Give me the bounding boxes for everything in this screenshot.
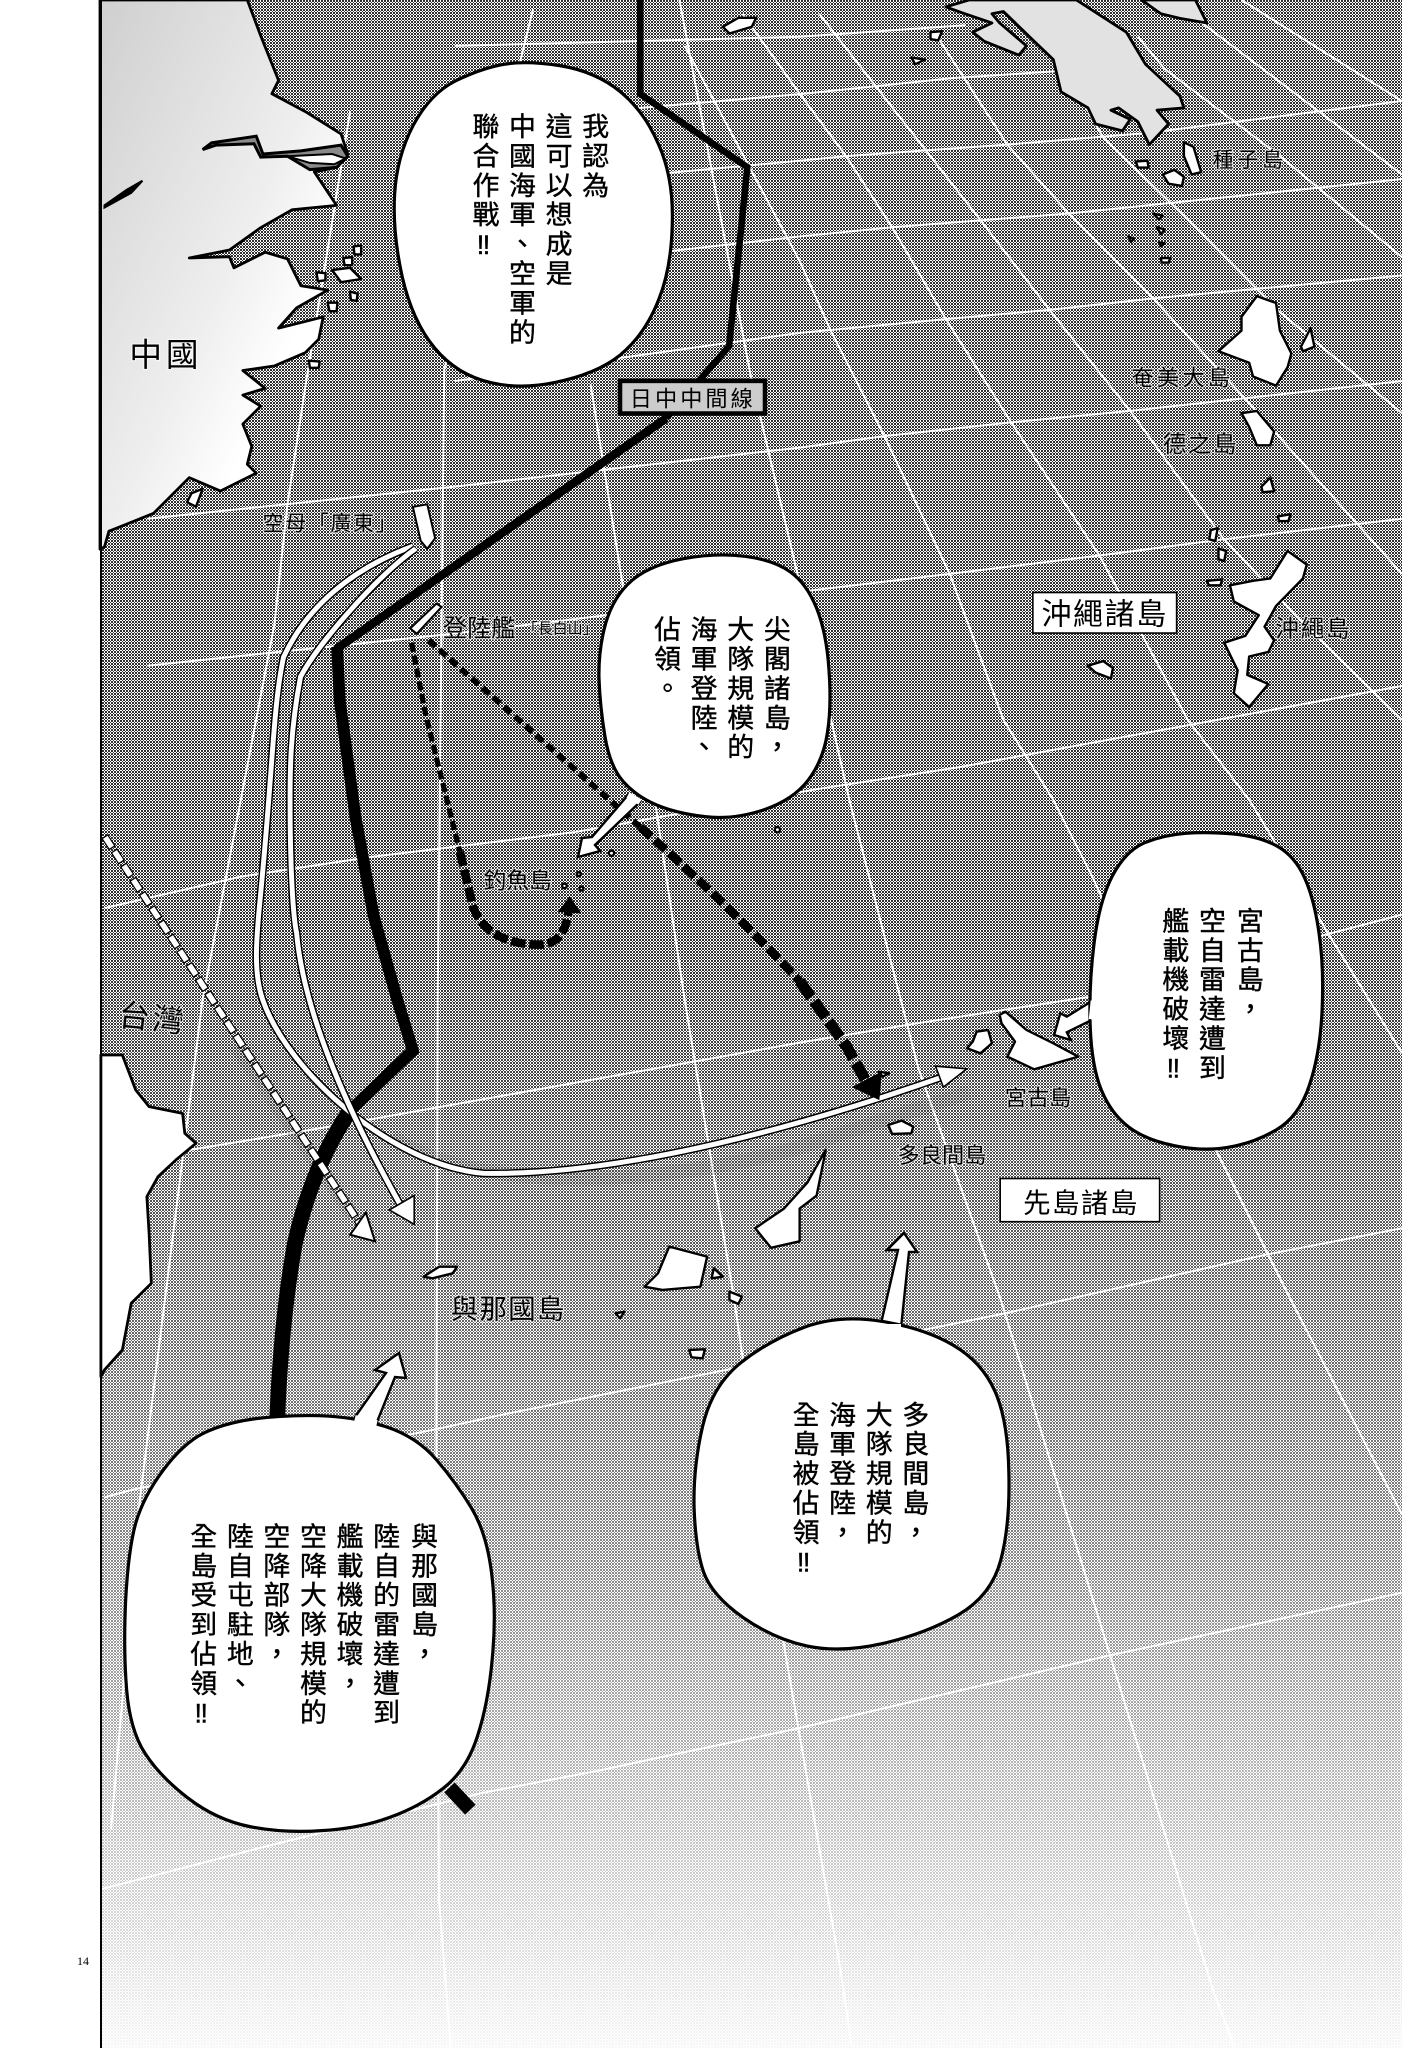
- label: Diaoyu: 釣魚島: [483, 867, 552, 893]
- label: Changbaishan: 「長白山」: [523, 621, 598, 638]
- land: Ishigaki and Senkaku islets: [562, 827, 826, 1248]
- bubble: Senkaku: 佔領。: [650, 615, 681, 704]
- label box: Sakishima islands: [1000, 1179, 1160, 1222]
- bubble: Yonaguni: [125, 1353, 494, 1831]
- bubble: Yonaguni: 艦載機破壞，: [333, 1522, 363, 1699]
- label: Amami: 奄美大島: [1132, 365, 1233, 390]
- bubble: Tarama: [694, 1233, 1009, 1649]
- label: Tokunoshima: 德之島: [1163, 431, 1238, 457]
- bubble: Tarama: 大隊規模的: [862, 1400, 892, 1548]
- label: China: 中國: [129, 336, 203, 373]
- page border line: [100, 0, 102, 2048]
- page number: 14: [77, 1954, 89, 1968]
- bubble: Miyako: 宮古島，: [1233, 906, 1263, 1024]
- bubble: top: [394, 63, 672, 386]
- bubble: Senkaku: 大隊規模的: [723, 615, 754, 762]
- Okinawa main island: [1224, 551, 1307, 707]
- land: Kyushu and northern Nansei islands: [911, 0, 1314, 707]
- bubble: Yonaguni: 空降大隊規模的: [296, 1522, 326, 1728]
- label: landing ship: 登陸艦: [443, 615, 515, 642]
- label box: Okinawa islands: 沖繩諸島: [1041, 599, 1168, 632]
- bubble: top: 中國海軍、空軍的: [505, 112, 535, 348]
- label: Miyako: 宮古島: [1005, 1085, 1071, 1110]
- bubble: top: 聯合作戰‼: [468, 112, 499, 262]
- label: Taiwan: 台灣: [117, 998, 188, 1040]
- bubble: top: 這可以想成是: [542, 112, 572, 289]
- page margin: [0, 0, 102, 2048]
- label: carrier: 空母「廣東」: [263, 512, 398, 535]
- Tokunoshima and Okinoerabu: [1088, 411, 1291, 679]
- median line: Japan-China: [277, 0, 747, 1810]
- label: Yonaguni: 與那國島: [451, 1293, 566, 1324]
- bubble: Yonaguni: 陸自屯駐地、: [223, 1522, 253, 1699]
- bubble: Tarama: 海軍登陸，: [825, 1400, 856, 1548]
- bubble: Tarama: 全島被佔領‼: [789, 1401, 819, 1580]
- Yonaguni and Yaeyama islands: [424, 1247, 742, 1358]
- speech bubbles: [125, 63, 1323, 1831]
- label: Tanegashima: 種子島: [1213, 149, 1287, 172]
- Tanegashima, Yakushima and Tokara islands: [911, 31, 1201, 263]
- bubble: Miyako: 空自雷達遭到: [1195, 906, 1225, 1083]
- icon: landing ship: [410, 604, 442, 634]
- bubble: Senkaku: 海軍登陸、: [687, 615, 717, 762]
- bubble: Senkaku: [578, 555, 830, 857]
- bubble: Yonaguni: 空降部隊，: [259, 1522, 289, 1669]
- bubble: Miyako: 艦載機破壞‼: [1158, 906, 1189, 1086]
- icon: carrier Guangdong: [413, 504, 435, 549]
- land: China coast: [100, 0, 756, 549]
- label box: median line: 日中中間線: [630, 386, 756, 411]
- bubble: Senkaku: 尖閣諸島，: [760, 615, 790, 762]
- land: Taiwan: [101, 1055, 742, 1377]
- label box: median line: [620, 381, 765, 414]
- route shadows: [235, 1045, 969, 1215]
- map labels: [117, 149, 1352, 1324]
- label: Tarama: 多良間島: [898, 1143, 986, 1168]
- bubble: Yonaguni: 陸自的雷達遭到: [369, 1522, 400, 1728]
- bubble: top: 我認為: [578, 112, 609, 201]
- land: Miyako and Tarama islands: [879, 1012, 1078, 1134]
- arrows: landing ship routes: [412, 640, 882, 1100]
- Amami Oshima: [1218, 296, 1314, 386]
- arrows: carrier aircraft routes: [256, 546, 967, 1224]
- bubble: Miyako: [1054, 833, 1323, 1149]
- bubble: Yonaguni: 與那國島，: [407, 1522, 437, 1669]
- arrow: white dashed route from Taiwan side: [105, 836, 375, 1241]
- bubble: Tarama: 多良間島，: [898, 1400, 928, 1548]
- bubble: Yonaguni: 全島受到佔領‼: [186, 1522, 217, 1731]
- label: Okinawa: 沖繩島: [1275, 615, 1352, 641]
- label box: Sakishima islands: 先島諸島: [1023, 1188, 1139, 1219]
